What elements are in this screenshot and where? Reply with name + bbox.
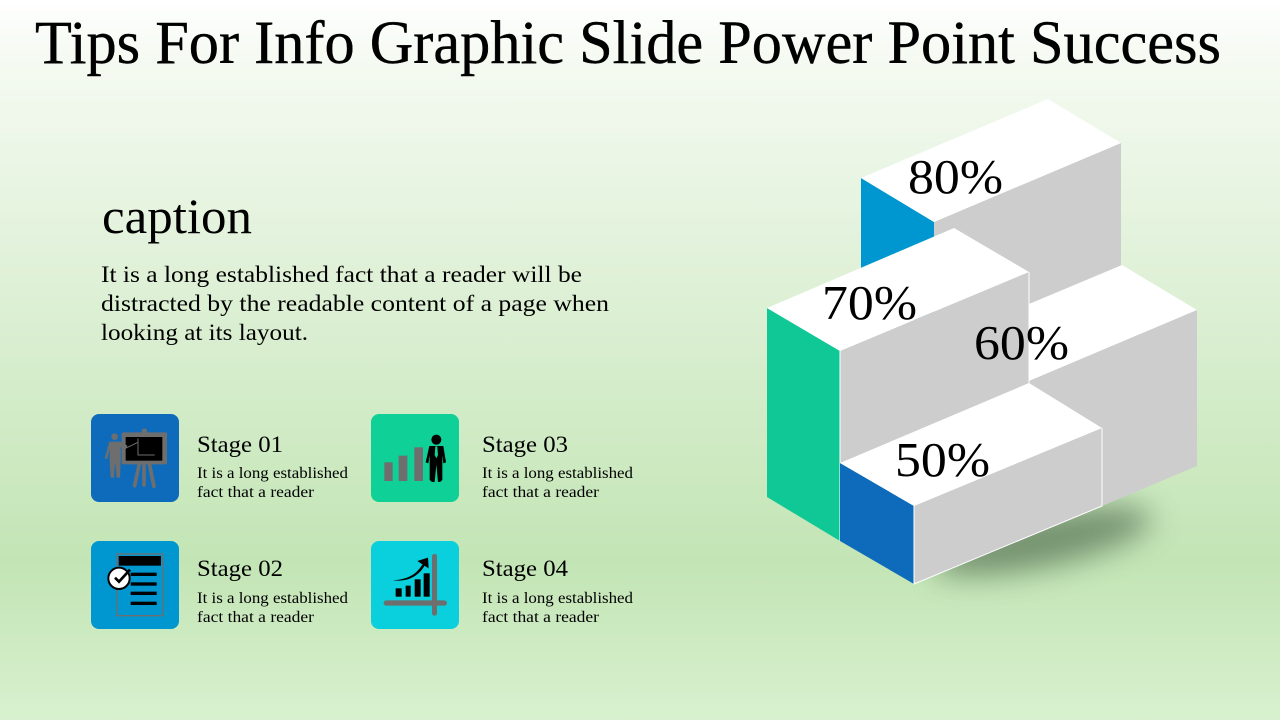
stage 03 text: fact that a reader	[482, 484, 600, 501]
shadow under blocks	[927, 492, 1157, 590]
stage 01 text: Stage 01	[197, 432, 283, 457]
stage 03 text: It is a long established	[482, 465, 633, 482]
label: 60%: 60%	[974, 315, 1069, 370]
stage 04 text: fact that a reader	[482, 609, 600, 626]
caption body text: It is a long established fact that a reader will be	[101, 262, 582, 288]
stage 04 text: It is a long established	[482, 590, 633, 607]
block: 70%	[767, 228, 1029, 541]
block: 50%	[840, 383, 1102, 584]
stage 01 text	[197, 432, 348, 501]
isometric block chart	[767, 99, 1197, 584]
label: 70%: 70%	[822, 275, 917, 330]
icon: bars and businessman	[371, 414, 459, 502]
stage 02 text: fact that a reader	[197, 609, 315, 626]
caption body text: looking at its layout.	[101, 320, 308, 346]
icon: growth chart	[371, 541, 459, 629]
stage 01 text: It is a long established	[197, 465, 348, 482]
block: 60%	[1029, 265, 1197, 506]
stage 02 text: It is a long established	[197, 590, 348, 607]
stage 01	[91, 414, 348, 502]
caption heading: caption	[102, 188, 252, 244]
block: 80%	[861, 99, 1121, 340]
stage 04 text: Stage 04	[482, 556, 569, 581]
caption body text	[101, 262, 609, 346]
caption body text: distracted by the readable content of a page when	[101, 291, 609, 317]
label: 50%: 50%	[895, 432, 990, 487]
icon: presenter at board	[91, 414, 179, 502]
label: 80%: 80%	[908, 149, 1003, 204]
stage 04	[371, 541, 633, 629]
stage 03	[371, 414, 633, 502]
stage 03 text	[482, 432, 633, 501]
stage 02	[91, 541, 348, 629]
stage 04 text	[482, 556, 633, 626]
stage 02 text	[197, 556, 348, 626]
stage 02 text: Stage 02	[197, 556, 283, 581]
stage 03 text: Stage 03	[482, 432, 568, 457]
stage 01 text: fact that a reader	[197, 484, 315, 501]
icon: checklist	[91, 541, 179, 629]
title: Tips For Info Graphic Slide Power Point Success	[35, 10, 1221, 77]
